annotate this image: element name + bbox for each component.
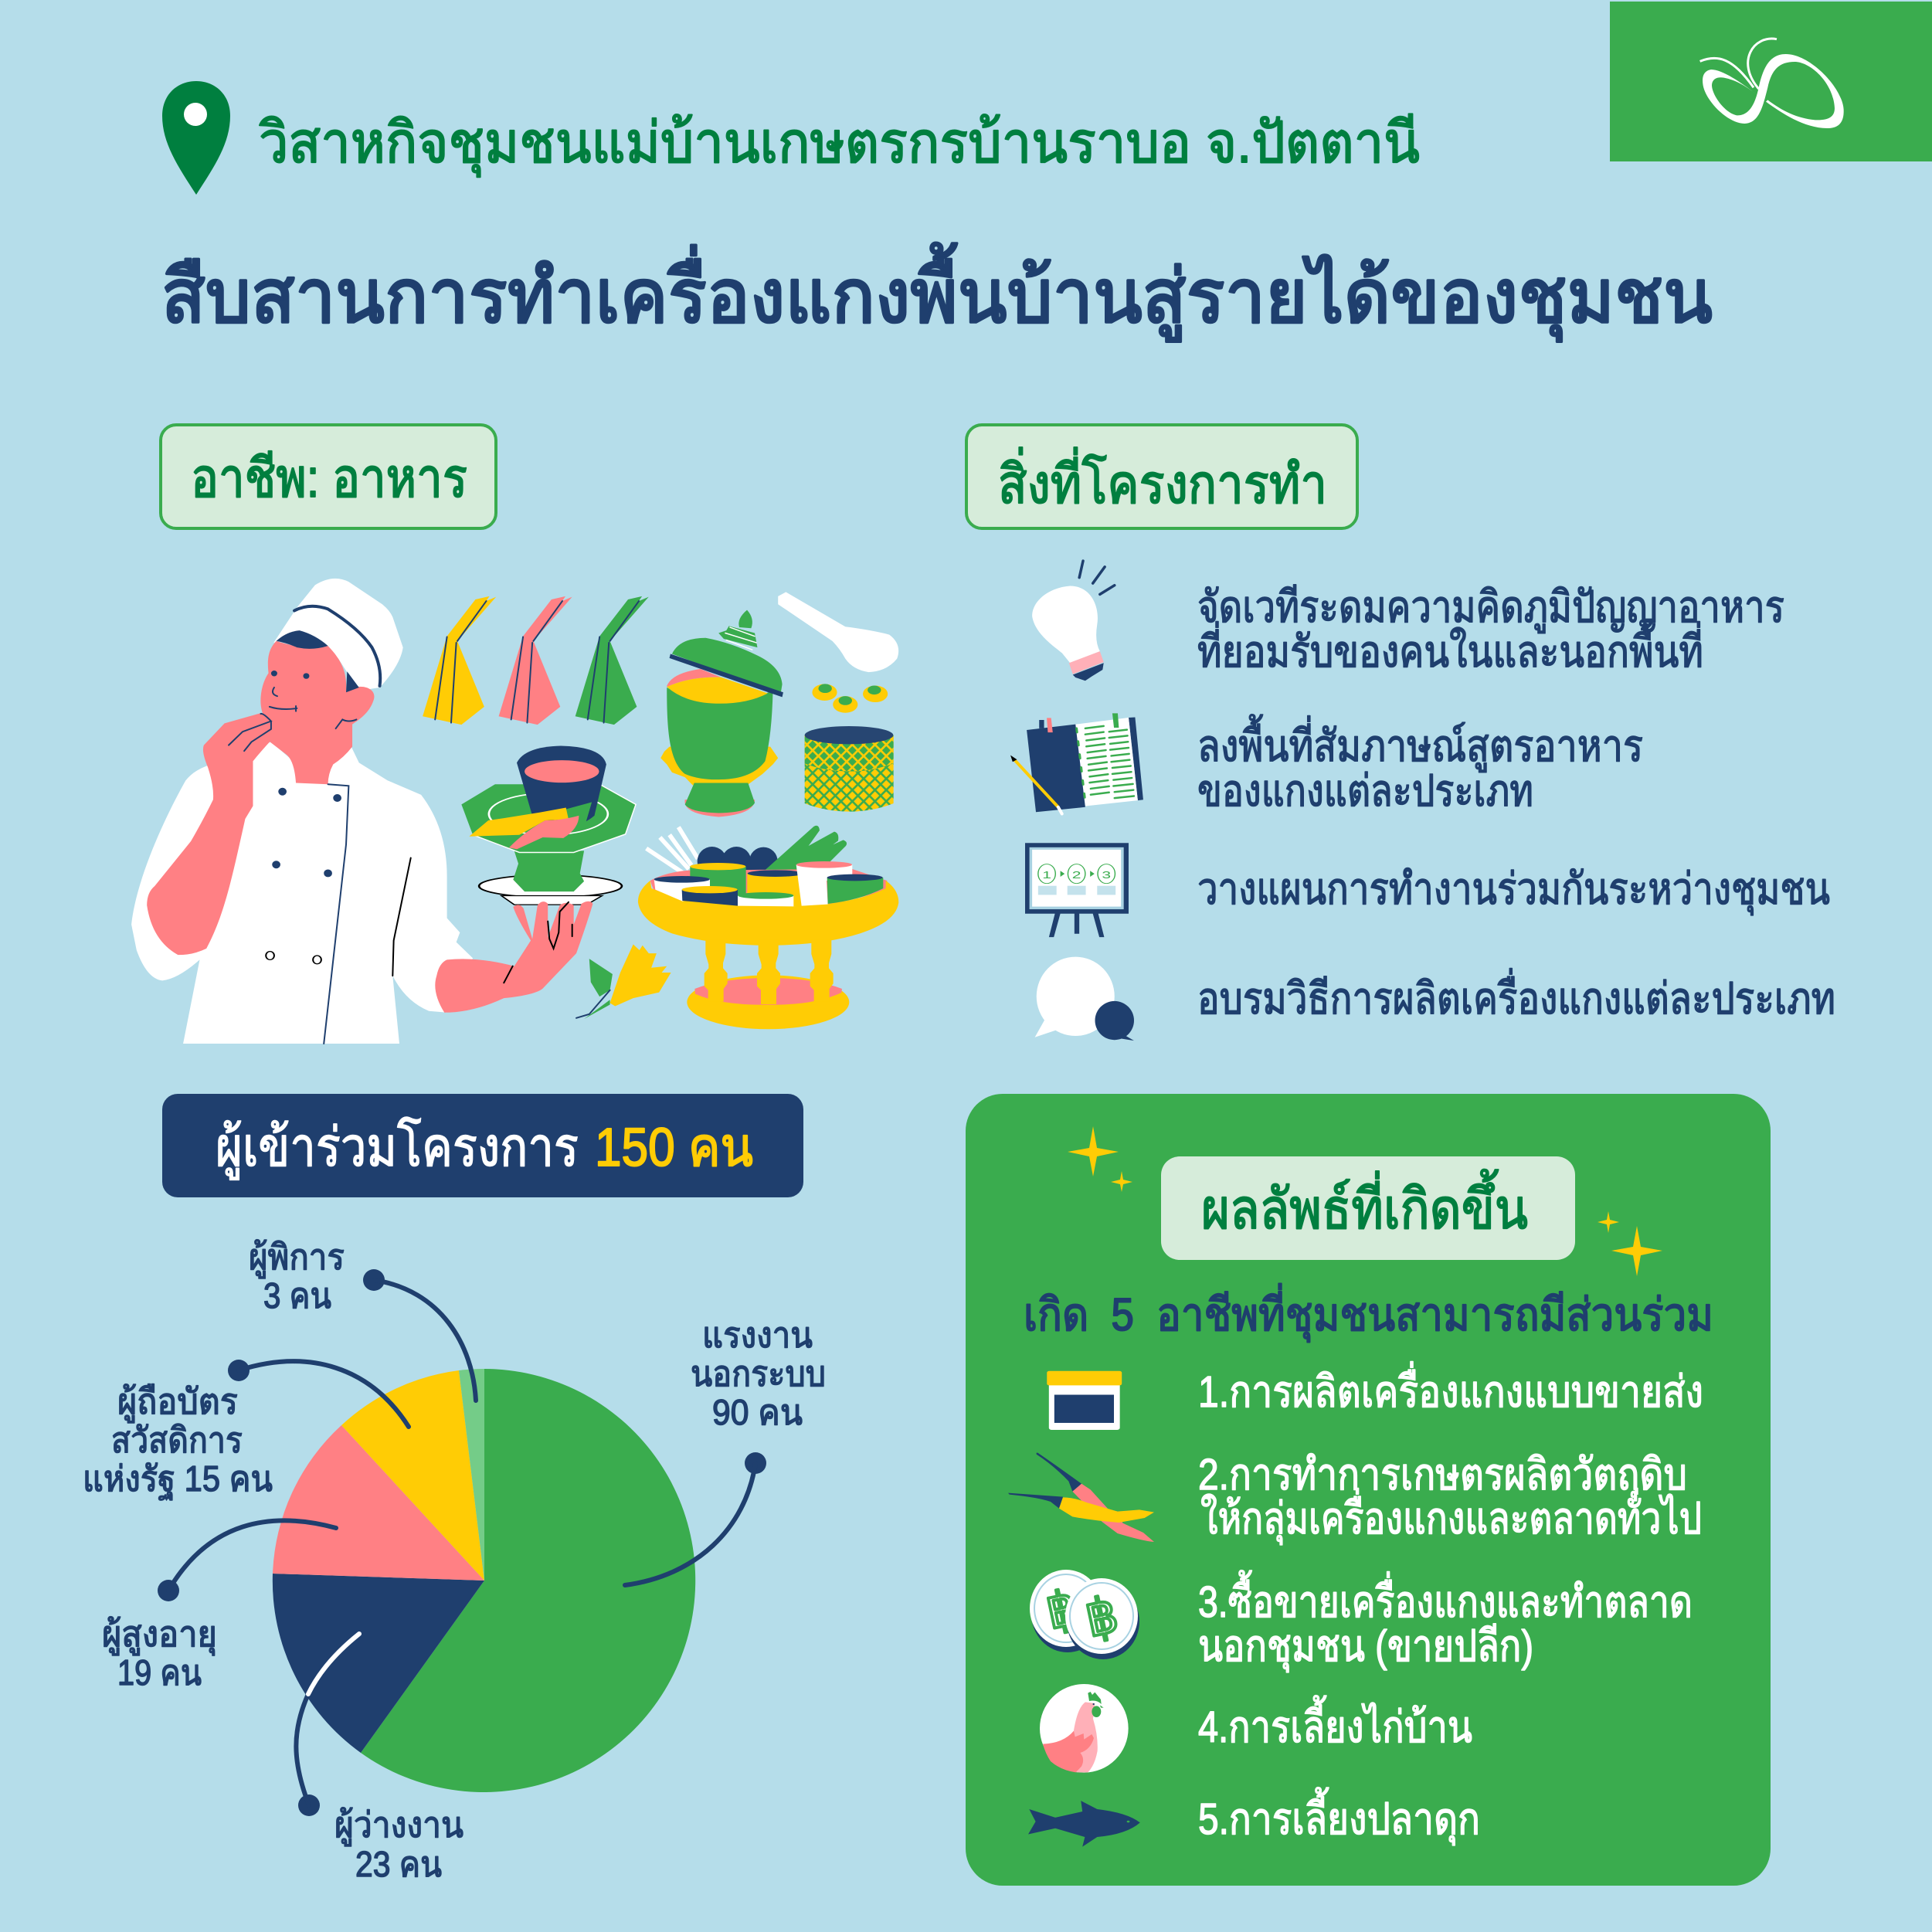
icon: sparkles right: [1598, 1211, 1662, 1276]
item 5: raising catfish: 5.การเลี้ยงปลาดุก: [1198, 1788, 1480, 1846]
chef hat: [273, 579, 403, 691]
panel: results: [966, 1094, 1771, 1886]
green urn with lid: [660, 610, 783, 817]
item 3: trading and retail: นอกชุมชน (ขายปลีก): [1198, 1621, 1533, 1673]
green leaf packet: [576, 596, 649, 725]
heading: occupation: อาชีพ: อาหาร: [191, 448, 467, 508]
icon: planning board: [1025, 843, 1129, 937]
hair: [277, 630, 359, 692]
item 2: farming raw materials: [1008, 1450, 1702, 1546]
label: disabled persons: ผู้พิการ: [249, 1237, 345, 1278]
icon: butterfly infinity logo: [1700, 39, 1844, 128]
label: unemployed: ผู้ว่างงาน: [334, 1805, 463, 1846]
label: elderly: [102, 1520, 336, 1693]
icon: planning board: 2: [1072, 869, 1081, 881]
jacket buttons and seams: [266, 784, 411, 1044]
label: elderly: ผู้สูงอายุ: [102, 1614, 217, 1656]
icon: baht coins: [1030, 1570, 1139, 1659]
icon: chili peppers: [1008, 1453, 1154, 1542]
heading: occupation: [161, 425, 496, 528]
banner: participants: 150 คน: [595, 1117, 753, 1177]
item 5: raising catfish: [1028, 1788, 1480, 1847]
bowl on plate: [461, 745, 636, 905]
label: welfare card holders: ผู้ถือบัตร: [117, 1381, 238, 1423]
icon: speech bubbles: [1035, 957, 1134, 1041]
label: informal workers: [625, 1315, 826, 1585]
woven basket: [805, 726, 894, 812]
label: unemployed: [296, 1634, 463, 1884]
item 1: wholesale curry paste: 1.การผลิตเครื่องแกงแบบขายส่ง: [1198, 1361, 1703, 1417]
activity 2: ของแกงแต่ละประเภท: [1197, 766, 1533, 816]
sub-heading: five occupations: เกิด 5 อาชีพที่ชุมชนสามารถมีส่วนร่วม: [1024, 1283, 1713, 1343]
subtitle: community enterprise: วิสาหกิจชุมชนแม่บ้านเกษตรกรบ้านราบอ จ.ปัตตานี: [259, 110, 1420, 178]
activity 1: จัดเวทีระดมความคิดภูมิปัญญาอาหาร: [1197, 582, 1784, 633]
label: informal workers: นอกระบบ: [691, 1353, 826, 1394]
head and neck: [260, 641, 374, 784]
offering tray with cups: [638, 826, 898, 1029]
item 2: farming raw materials: 2.การทำการเกษตรผลิตวัตถุดิบ: [1198, 1450, 1687, 1502]
activity 2: [1010, 713, 1643, 816]
item 2: farming raw materials: ให้กลุ่มเครื่องแกงและตลาดทั่วไป: [1200, 1488, 1702, 1546]
label: welfare card holders: สวัสดิการ: [111, 1420, 243, 1460]
heading: results: [1161, 1156, 1575, 1260]
label: welfare card holders: แห่งรัฐ 15 คน: [83, 1458, 273, 1500]
hat band: [294, 606, 380, 686]
yellow galangal flower: [576, 944, 671, 1019]
icon: location pin: [162, 81, 230, 195]
logo block: [1610, 2, 1932, 161]
activity 2: ลงพื้นที่สัมภาษณ์สูตรอาหาร: [1197, 715, 1643, 772]
heading: project activities: [966, 425, 1357, 528]
item 4: raising chickens: 4.การเลี้ยงไก่บ้าน: [1198, 1696, 1472, 1752]
icon: planning board: 1: [1042, 869, 1051, 881]
icon: light bulb: [1032, 561, 1115, 681]
item 3: trading and retail: [1030, 1570, 1693, 1673]
activity 1: ที่ยอมรับของคนในและนอกพื้นที่: [1197, 620, 1703, 677]
right hand: [435, 901, 593, 1013]
white pestle: [778, 592, 898, 672]
activity 3: [1025, 843, 1830, 937]
activity 4: [1035, 957, 1835, 1041]
face details: [270, 671, 356, 728]
heading: results: ผลลัพธ์ที่เกิดขึ้น: [1201, 1169, 1528, 1241]
icon: notebook and pencil: [1010, 713, 1143, 813]
chef and dishes: [131, 579, 898, 1044]
icon: sparkles left: [1068, 1126, 1132, 1192]
icon: baht coins: ฿: [1081, 1587, 1123, 1647]
illustration: chef with curry dishes: [131, 579, 898, 1044]
label: unemployed: 23 คน: [355, 1844, 442, 1884]
pink leaf packet: [499, 596, 572, 725]
icon: paste tub: [1047, 1371, 1122, 1430]
arm and hand at chin: [147, 713, 273, 955]
label: disabled persons: [249, 1237, 476, 1401]
yellow leaf packet: [423, 596, 496, 725]
label: informal workers: 90 คน: [712, 1392, 803, 1432]
heading: project activities: สิ่งที่โครงการทำ: [998, 447, 1327, 514]
label: welfare card holders: [83, 1360, 409, 1500]
icon: fish: [1028, 1801, 1140, 1847]
activity 1: [1032, 561, 1784, 681]
icon: baht coins: ฿: [1041, 1581, 1082, 1639]
item 4: raising chickens: [1040, 1684, 1472, 1773]
icon: chicken: [1040, 1684, 1129, 1773]
label: elderly: 19 คน: [117, 1652, 202, 1693]
banner: participants: [162, 1094, 803, 1197]
small flowers: [812, 684, 888, 713]
pie chart: participants by group: [273, 1369, 695, 1792]
item 3: trading and retail: 3.ซื้อขายเครื่องแกงและทำตลาด: [1198, 1570, 1693, 1627]
banner: participants: ผู้เข้าร่วมโครงการ: [216, 1116, 579, 1180]
label: disabled persons: 3 คน: [263, 1275, 331, 1316]
title: สืบสานการทำเครื่องแกงพื้นบ้านสู่รายได้ของชุมชน: [161, 243, 1713, 342]
label: informal workers: แรงงาน: [702, 1315, 813, 1355]
chef jacket: [131, 742, 473, 1044]
icon: planning board: 3: [1102, 869, 1111, 881]
item 1: wholesale curry paste: [1047, 1361, 1703, 1430]
